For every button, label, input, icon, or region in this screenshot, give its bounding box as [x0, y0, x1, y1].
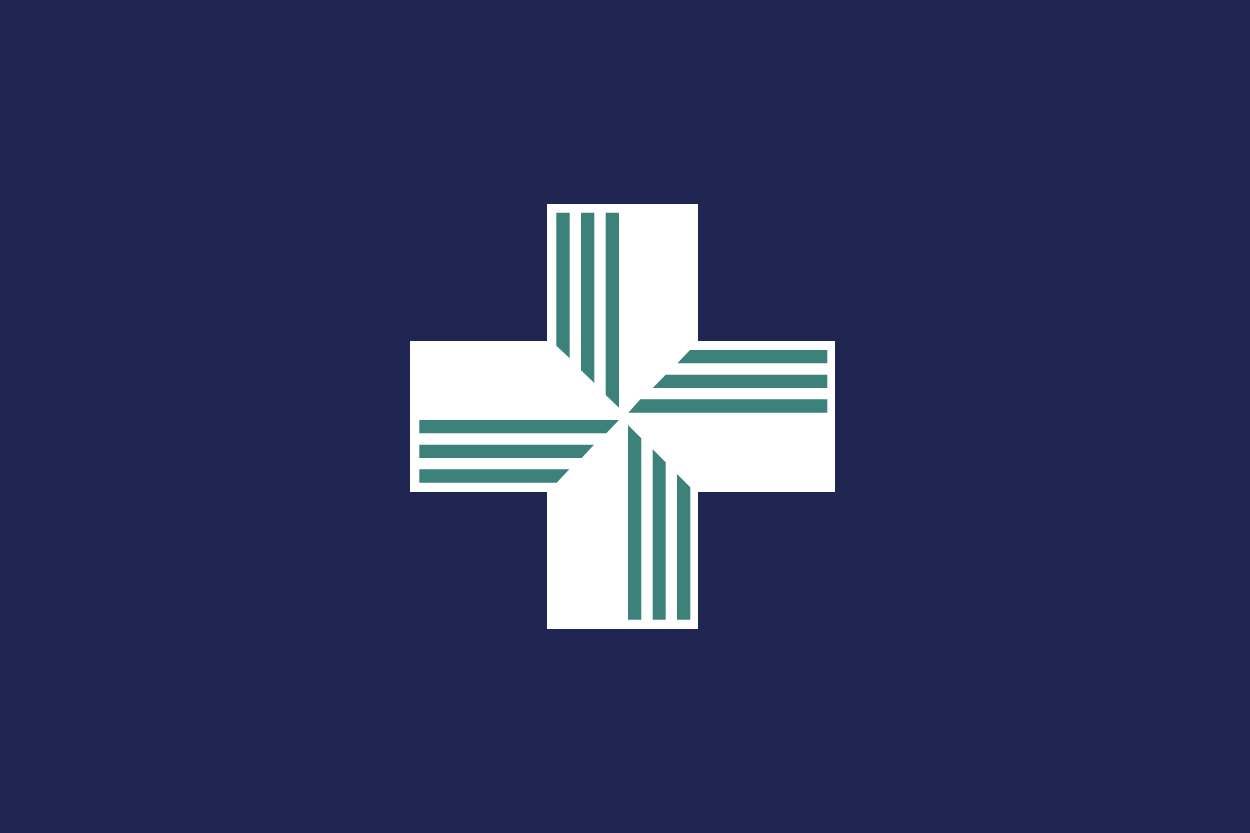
icon: white cross [410, 204, 835, 629]
right arm stripes [628, 350, 827, 413]
bottom arm stripes [628, 425, 690, 620]
top arm stripes [556, 213, 619, 408]
left arm stripes [419, 420, 619, 483]
